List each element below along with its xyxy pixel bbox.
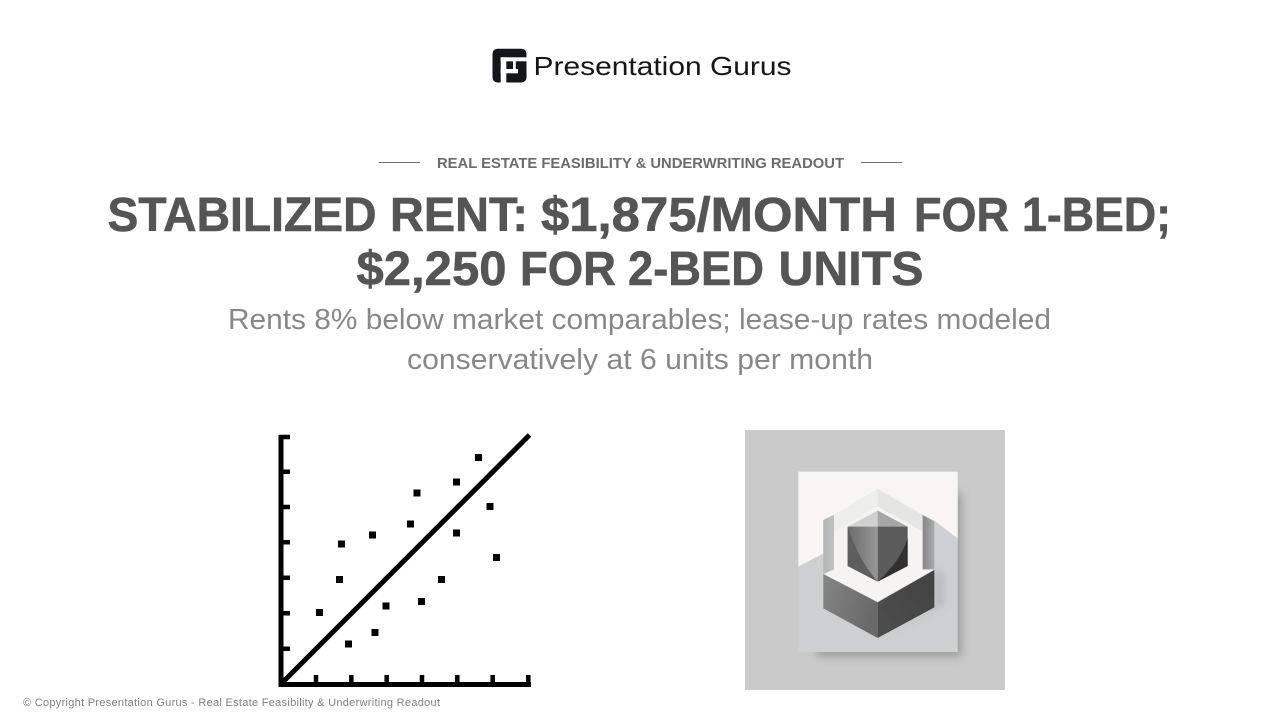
eyebrow label: REAL ESTATE FEASIBILITY & UNDERWRITING READOUT (437, 155, 844, 172)
title: UNITS (778, 243, 924, 296)
data points (316, 454, 500, 648)
title: RENT: (390, 189, 528, 242)
title: 2-BED (628, 243, 764, 296)
title (108, 189, 1171, 296)
scatter chart with trend line (278, 433, 532, 687)
subtitle (228, 304, 1051, 376)
white top panel (798, 472, 958, 567)
chart axes and ticks (279, 435, 531, 685)
title: FOR (914, 189, 1009, 242)
illustration: isometric hexagon on card (745, 430, 1005, 690)
logo: Presentation Gurus (492, 48, 792, 82)
inner gem (848, 511, 908, 582)
subtitle: Rents 8% below market comparables; lease-up rates modeled (228, 304, 1051, 336)
trend line (281, 435, 530, 684)
card shadow (817, 493, 962, 657)
icon: logo mark (492, 49, 527, 83)
title: FOR (520, 243, 616, 296)
block shadow on card (878, 569, 943, 640)
logo wordmark: Presentation Gurus (534, 51, 792, 81)
title: $2,250 (356, 243, 506, 296)
title: STABILIZED (108, 189, 376, 242)
subtitle: conservatively at 6 units per month (407, 344, 873, 376)
title: $1,875/MONTH (541, 189, 897, 242)
card base (798, 471, 958, 652)
copyright footer: © Copyright Presentation Gurus - Real Estate Feasibility & Underwriting Readout (23, 697, 440, 709)
hexagon frame (823, 489, 934, 602)
title: 1-BED; (1022, 189, 1171, 242)
lower block faces (823, 570, 934, 638)
